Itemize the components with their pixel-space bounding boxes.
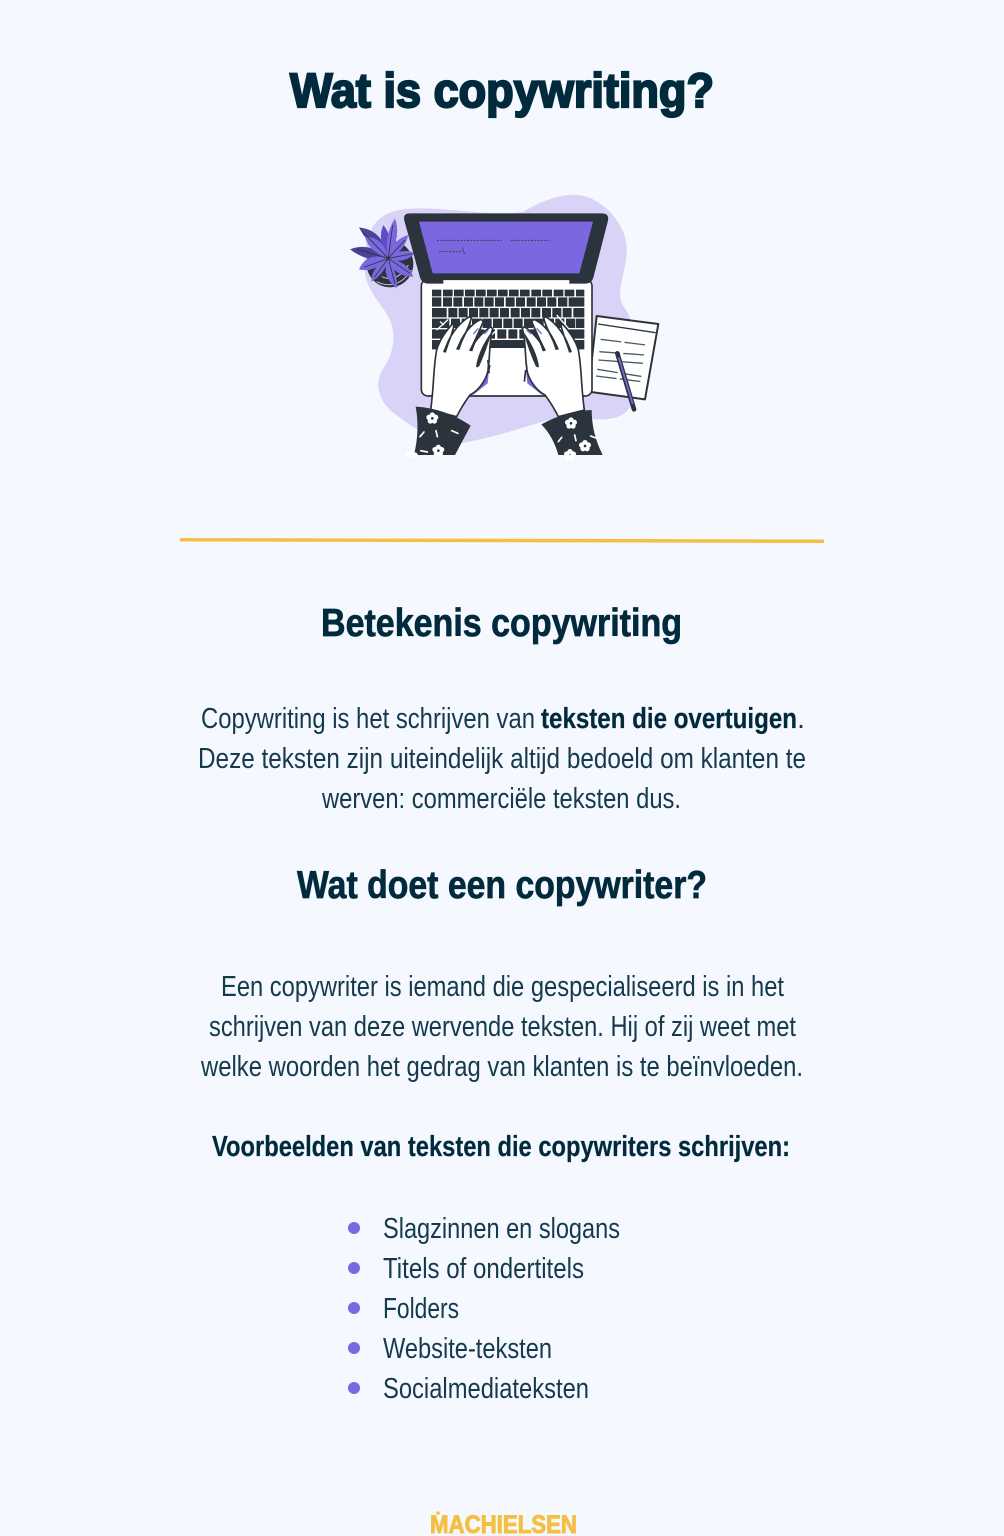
heading: wat doet een copywriter: Wat doet een copywriter?: [297, 864, 707, 907]
icon: left hand: [431, 317, 493, 417]
list: examples of texts: Slagzinnen en slogans: [383, 1213, 620, 1245]
laptop base: [421, 279, 592, 396]
text block: definition: Deze teksten zijn uiteindelijk altijd bedoeld om klanten te: [198, 743, 806, 775]
list: examples of texts: [348, 1213, 620, 1405]
illustration: hands typing on laptop: [350, 195, 658, 460]
text block: definition: werven: commerciële teksten dus.: [321, 783, 681, 815]
list: examples of texts: Socialmediateksten: [383, 1373, 589, 1405]
background blob: [365, 195, 636, 443]
icon: plant: [350, 218, 415, 288]
icon: left sleeve: [406, 407, 471, 458]
text block: definition: Copywriting is het schrijven van: [201, 703, 535, 735]
text block: copywriter description: Een copywriter is iemand die gespecialiseerd is in het: [221, 971, 784, 1003]
list: examples of texts: Website-teksten: [383, 1333, 552, 1365]
text block: definition: [198, 703, 806, 815]
list: examples of texts: Titels of ondertitels: [383, 1253, 584, 1285]
text block: copywriter description: schrijven van deze wervende teksten. Hij of zij weet met: [209, 1011, 796, 1043]
heading: betekenis copywriting: Betekenis copywriting: [321, 602, 682, 645]
text block: copywriter description: welke woorden het gedrag van klanten is te beïnvloeden.: [200, 1051, 803, 1083]
title: Wat is copywriting?: [290, 65, 714, 118]
text block: definition: .: [797, 703, 805, 735]
icon: right sleeve: [541, 410, 603, 460]
list: examples of texts: Folders: [383, 1293, 459, 1325]
laptop keyboard: [432, 290, 584, 349]
icon: right hand: [522, 317, 584, 417]
icon: notepad with pen: [588, 316, 658, 409]
laptop screen: [404, 213, 608, 284]
text block: definition: teksten die overtuigen: [541, 703, 797, 735]
text block: copywriter description: [200, 971, 803, 1083]
subheading: examples: Voorbeelden van teksten die copywriters schrijven:: [212, 1131, 790, 1163]
